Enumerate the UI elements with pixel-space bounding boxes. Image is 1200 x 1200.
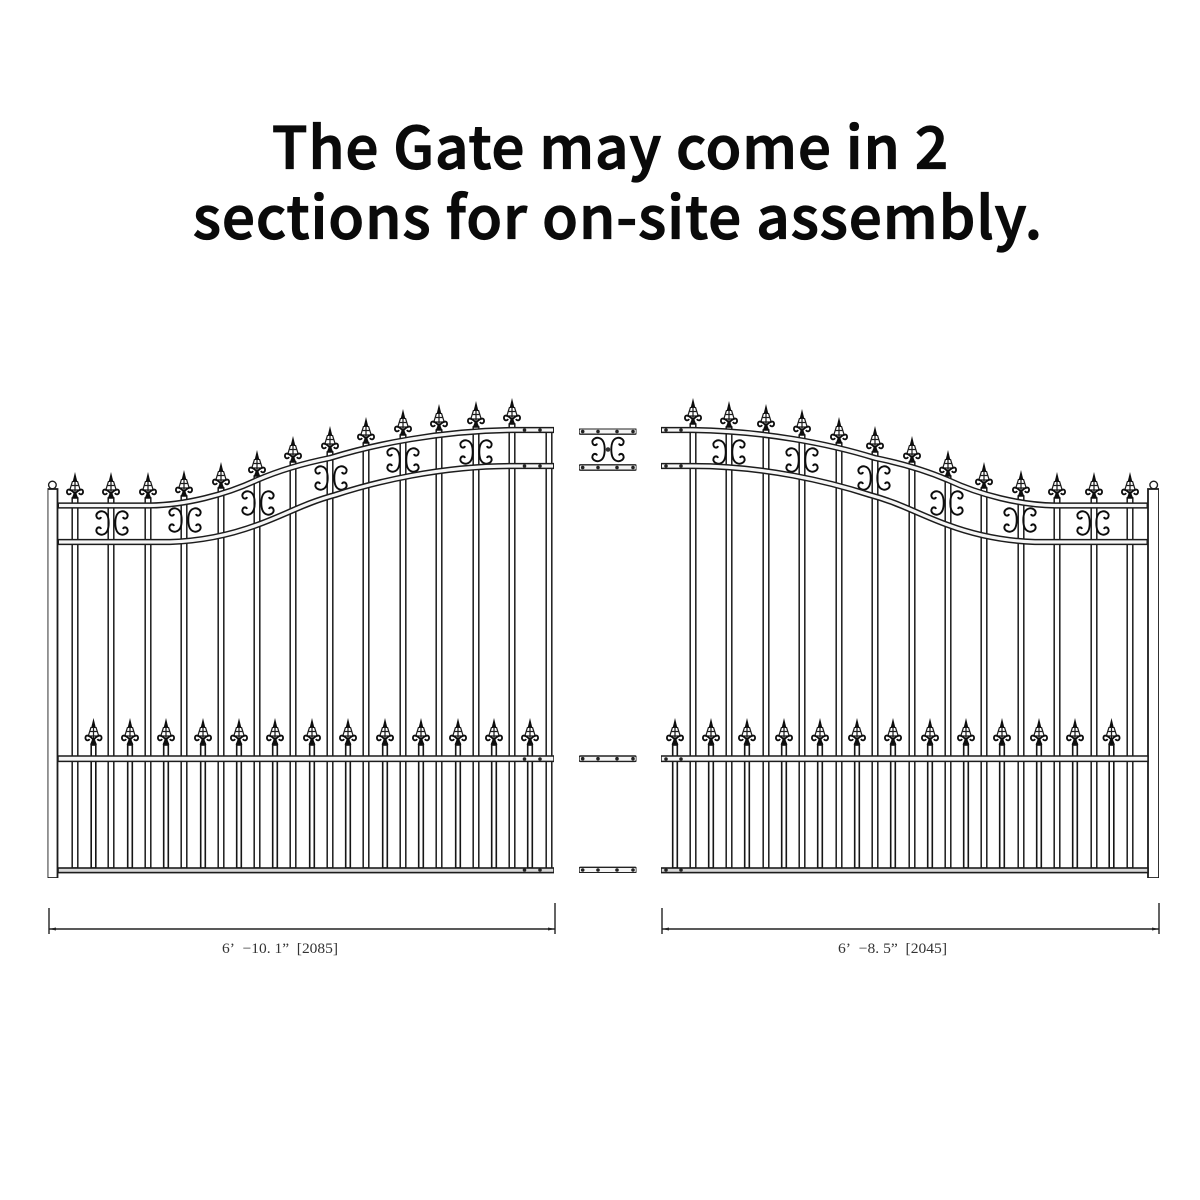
right gate bottom rail bbox=[661, 868, 1148, 873]
connector plate second bbox=[579, 465, 636, 470]
left gate bottom rail bbox=[58, 868, 554, 873]
right gate lower picket bars with spears bbox=[667, 718, 1120, 868]
right gate curved mid rail bbox=[661, 466, 1148, 542]
left gate lower picket bars with spears bbox=[85, 718, 538, 868]
connector plates and scroll bbox=[579, 429, 636, 873]
right gate vertical bars bbox=[690, 424, 1133, 868]
left gate scroll ornaments bbox=[96, 440, 492, 535]
left gate leaf bbox=[48, 398, 554, 878]
left gate curved mid rail bbox=[58, 466, 554, 542]
right gate curved top rail bbox=[661, 430, 1148, 506]
left gate rivets bbox=[523, 428, 542, 872]
left gate curved top rail bbox=[58, 430, 554, 506]
left dimension label: 6’ −10. 1” [2085] bbox=[222, 941, 338, 957]
right gate hinge post bbox=[1148, 481, 1159, 878]
right gate top spears bbox=[685, 398, 1138, 498]
right dimension label: 6’ −8. 5” [2045] bbox=[838, 941, 947, 957]
right gate lower rail bbox=[661, 756, 1148, 761]
right dimension line bbox=[662, 903, 1159, 957]
left gate top spears bbox=[67, 398, 520, 498]
left gate latch-side stile bbox=[546, 432, 552, 868]
connector plate bottom bbox=[579, 867, 636, 873]
right gate rivets bbox=[664, 428, 683, 872]
connector plate third bbox=[579, 756, 636, 761]
connector plate top bbox=[579, 429, 636, 434]
title: sections for on-site assembly. bbox=[193, 172, 1042, 256]
title bbox=[193, 102, 1042, 256]
connector centre scroll bbox=[592, 438, 624, 461]
right gate scroll ornaments bbox=[713, 440, 1109, 535]
left gate vertical bars bbox=[72, 424, 515, 868]
left gate lower rail bbox=[58, 756, 554, 761]
right gate leaf bbox=[661, 398, 1159, 878]
title: The Gate may come in 2 bbox=[272, 102, 948, 186]
left dimension line bbox=[49, 903, 555, 957]
left gate hinge post bbox=[48, 481, 58, 878]
